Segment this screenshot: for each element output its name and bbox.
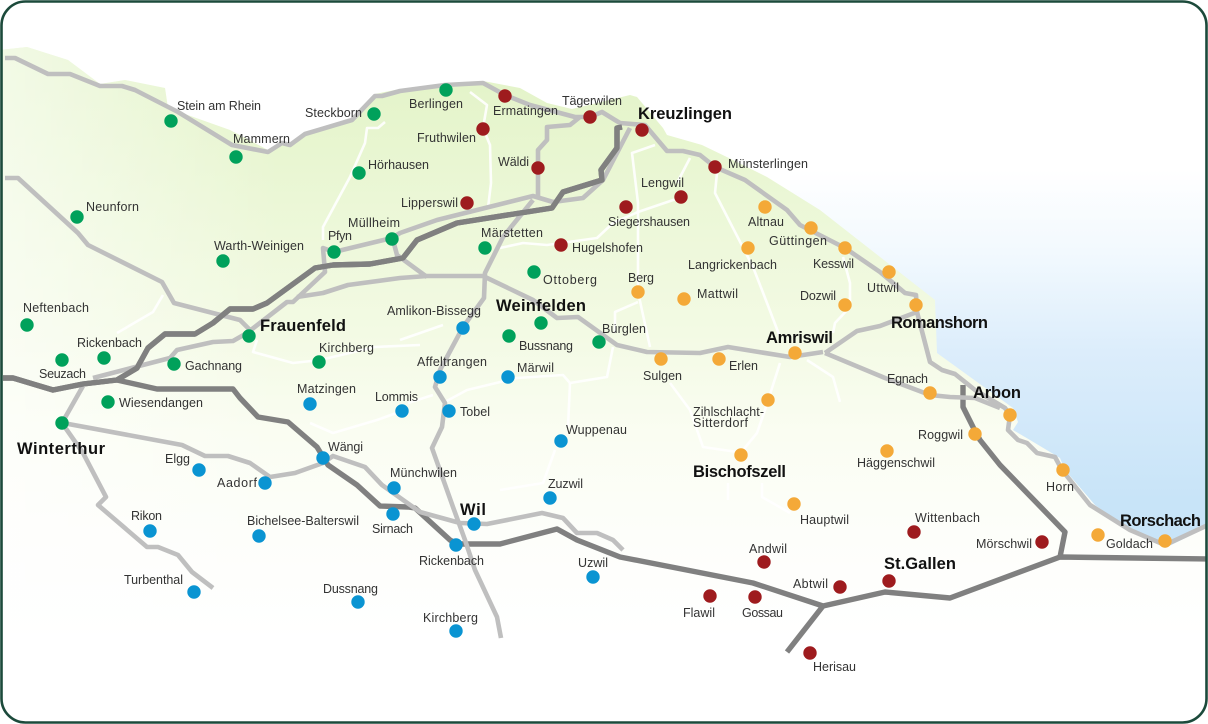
town: Hauptwil — [787, 497, 849, 527]
town: Horn: Horn — [1046, 480, 1074, 494]
town: Sirnach — [372, 507, 413, 536]
main rail lines — [3, 127, 1208, 652]
town: Herisau — [803, 646, 856, 674]
town: Lipperswil: Lipperswil — [401, 196, 458, 210]
town: Kreuzlingen — [635, 105, 732, 137]
town: Zuzwil: Zuzwil — [548, 477, 583, 491]
town: Lommis — [375, 390, 418, 418]
town: Stein am Rhein: Stein am Rhein — [177, 99, 261, 113]
town: Wittenbach — [907, 511, 980, 539]
town: Egnach: Egnach — [887, 372, 928, 386]
town: Fruthwilen — [418, 122, 490, 142]
town: Fruthwilen: Fruthwilen — [417, 131, 476, 145]
town: Altnau — [748, 200, 784, 229]
town: Romanshorn — [891, 298, 988, 332]
town: Matzingen: Matzingen — [297, 382, 356, 396]
town: Rikon: Rikon — [131, 509, 162, 523]
town: Berlingen — [409, 83, 463, 111]
town: Turbenthal: Turbenthal — [124, 573, 183, 587]
town: Bussnang: Bussnang — [519, 339, 573, 353]
town: Affeltrangen — [417, 355, 487, 384]
town: Goldach: Goldach — [1106, 537, 1153, 551]
town: Abtwil — [793, 577, 847, 594]
town: Zihlschlacht-Sitterdorf — [693, 393, 775, 430]
land area — [2, 47, 1206, 570]
town: Bussnang — [502, 329, 573, 353]
town markers: blue region — [124, 304, 627, 638]
town: Bischofszell — [693, 448, 786, 481]
town: Wil — [460, 501, 486, 531]
town: Mörschwil: Mörschwil — [976, 537, 1032, 551]
town: Langrickenbach — [688, 241, 777, 272]
town: Gossau — [742, 590, 783, 620]
town: Güttingen: Güttingen — [769, 234, 827, 248]
town: Dussnang: Dussnang — [323, 582, 378, 596]
town markers: red region — [401, 89, 1049, 674]
town markers: orange region — [628, 200, 1201, 551]
town: Frauenfeld — [242, 317, 346, 343]
town: Winterthur: Winterthur — [17, 440, 106, 458]
town: Hugelshofen: Hugelshofen — [572, 241, 643, 255]
town: Goldach — [1091, 528, 1153, 551]
town: Rickenbach south: Rickenbach — [419, 554, 484, 568]
town: Rorschach: Rorschach — [1120, 512, 1201, 530]
town: Turbenthal — [124, 573, 201, 599]
town: Gachnang: Gachnang — [185, 359, 242, 373]
town: Lommis: Lommis — [375, 390, 418, 404]
town: Amriswil — [766, 329, 833, 360]
town: Sulgen: Sulgen — [643, 369, 682, 383]
town: Märstetten — [478, 226, 543, 255]
secondary rail lines — [5, 58, 1208, 638]
town: Amlikon-Bissegg: Amlikon-Bissegg — [387, 304, 481, 318]
town: Siegershausen — [608, 200, 690, 229]
town: Aadorf: Aadorf — [217, 476, 258, 490]
town: Uttwil — [867, 265, 899, 295]
town: Arbon: Arbon — [973, 384, 1021, 402]
town: Dozwil: Dozwil — [800, 289, 836, 303]
town: St.Gallen — [882, 555, 956, 588]
town: Gachnang — [167, 357, 242, 373]
town: Sirnach: Sirnach — [372, 522, 413, 536]
town: Kirchberg north: Kirchberg — [319, 341, 374, 355]
town: Münsterlingen: Münsterlingen — [728, 157, 808, 171]
town: Mattwil: Mattwil — [697, 287, 738, 301]
town: Münchwilen: Münchwilen — [390, 466, 457, 480]
town: Berg — [628, 271, 654, 299]
town: Hörhausen: Hörhausen — [368, 158, 429, 172]
town: Altnau: Altnau — [748, 215, 784, 229]
town: Lengwil: Lengwil — [641, 176, 684, 190]
town: Lengwil — [641, 176, 688, 204]
town: Kirchberg south: Kirchberg — [423, 611, 478, 625]
town: Rorschach — [1120, 512, 1201, 548]
town: Roggwil — [918, 427, 982, 442]
town: Bichelsee-Balterswil: Bichelsee-Balterswil — [247, 514, 359, 528]
town: Romanshorn: Romanshorn — [891, 314, 988, 332]
town markers: green region — [17, 83, 646, 458]
town: Herisau: Herisau — [813, 660, 856, 674]
town: Roggwil: Roggwil — [918, 428, 963, 442]
town: Müllheim: Müllheim — [348, 216, 400, 230]
town: Wil: Wil — [460, 501, 486, 519]
town: Erlen — [712, 352, 758, 373]
town: Uzwil: Uzwil — [578, 556, 608, 570]
town: Warth-Weinigen — [214, 239, 304, 268]
town: Bichelsee-Balterswil — [247, 514, 359, 543]
town: Arbon — [973, 384, 1021, 422]
town: Pfyn — [327, 229, 352, 259]
town: Uzwil — [578, 556, 608, 584]
town: Rickenbach south — [419, 538, 484, 568]
town: Häggenschwil — [857, 444, 935, 470]
town: Amriswil: Amriswil — [766, 329, 833, 347]
town: Wuppenau — [554, 423, 627, 448]
town: Ottoberg: Ottoberg — [543, 273, 597, 287]
town: Märstetten: Märstetten — [481, 226, 543, 240]
town: Zihlschlacht-Sitterdorf: Zihlschlacht- — [693, 405, 764, 419]
town: Affeltrangen: Affeltrangen — [417, 355, 487, 369]
town: Neunforn — [70, 200, 139, 224]
town: Tobel — [442, 404, 490, 419]
town: Sulgen — [643, 352, 682, 383]
town: Tägerwilen: Tägerwilen — [562, 94, 622, 108]
town: Häggenschwil: Häggenschwil — [857, 456, 935, 470]
town: Elgg — [165, 452, 206, 477]
town: Horn — [1046, 463, 1074, 494]
town: Kreuzlingen: Kreuzlingen — [638, 105, 732, 123]
town: Kirchberg south — [423, 611, 478, 638]
town: Flawil: Flawil — [683, 606, 715, 620]
town: Mattwil — [677, 287, 738, 306]
upper rail lines beneath main line — [5, 117, 823, 378]
town: Stein am Rhein — [164, 99, 261, 128]
town: Egnach — [887, 372, 937, 400]
town: Märwil — [501, 361, 554, 384]
town: Kesswil: Kesswil — [813, 257, 854, 271]
town: Münchwilen — [387, 466, 457, 495]
town: Dozwil — [800, 289, 852, 312]
town: Wuppenau: Wuppenau — [566, 423, 627, 437]
land west fade — [2, 47, 192, 417]
town: Weinfelden: Weinfelden — [496, 297, 586, 315]
town: Güttingen — [769, 221, 827, 248]
town: Neftenbach — [20, 301, 89, 332]
minor roads — [117, 92, 850, 513]
lake — [836, 221, 1206, 548]
town: St.Gallen: St.Gallen — [884, 555, 956, 573]
town: Uttwil: Uttwil — [867, 281, 899, 295]
town: Winterthur — [17, 416, 106, 458]
town: Hugelshofen — [554, 238, 643, 255]
town: Bischofszell: Bischofszell — [693, 463, 786, 481]
town: Müllheim — [348, 216, 400, 246]
main line overlay — [3, 127, 622, 390]
town: Rickenbach west: Rickenbach — [77, 336, 142, 350]
town: Mörschwil — [976, 535, 1049, 551]
town: Ermatingen: Ermatingen — [493, 104, 558, 118]
town: Wittenbach: Wittenbach — [915, 511, 980, 525]
town: Siegershausen: Siegershausen — [608, 215, 690, 229]
town: Kesswil — [813, 241, 854, 271]
town: Seuzach — [40, 353, 86, 378]
town: Berlingen: Berlingen — [409, 97, 463, 111]
town: Andwil — [749, 542, 787, 569]
town: Rickenbach west — [77, 336, 142, 365]
town: Abtwil: Abtwil — [793, 577, 828, 591]
town: Wängi: Wängi — [328, 440, 363, 454]
town: Frauenfeld: Frauenfeld — [260, 317, 346, 335]
town: Wängi — [316, 440, 363, 465]
town: Erlen: Erlen — [729, 359, 758, 373]
town: Kirchberg north — [312, 341, 374, 369]
town: Pfyn: Pfyn — [328, 229, 352, 243]
town: Wäldi — [498, 155, 545, 175]
town: Flawil — [683, 589, 717, 620]
town: Ermatingen — [493, 89, 558, 118]
town: Warth-Weinigen: Warth-Weinigen — [214, 239, 304, 253]
town: Hörhausen — [352, 158, 429, 180]
town: Mammern — [229, 132, 290, 164]
town: Ottoberg — [527, 265, 597, 287]
town: Berg: Berg — [628, 271, 654, 285]
town: Langrickenbach: Langrickenbach — [688, 258, 777, 272]
town: Rikon — [131, 509, 162, 538]
town: Elgg: Elgg — [165, 452, 190, 466]
town: Mammern: Mammern — [233, 132, 290, 146]
town: Zuzwil — [543, 477, 583, 505]
town: Steckborn: Steckborn — [305, 106, 362, 120]
town: Neftenbach: Neftenbach — [23, 301, 89, 315]
town: Hauptwil: Hauptwil — [800, 513, 849, 527]
town: Wäldi: Wäldi — [498, 155, 529, 169]
town: Tobel: Tobel — [460, 405, 490, 419]
town: Bürglen — [592, 322, 646, 349]
town: Matzingen — [297, 382, 356, 411]
town: Dussnang — [323, 582, 378, 609]
town: Weinfelden — [496, 297, 586, 330]
town: Wiesendangen: Wiesendangen — [119, 396, 203, 410]
town: Seuzach: Seuzach — [39, 367, 86, 381]
town: Andwil: Andwil — [749, 542, 787, 556]
town: Bürglen: Bürglen — [602, 322, 646, 336]
town: Gossau: Gossau — [742, 606, 783, 620]
town: Märwil: Märwil — [517, 361, 554, 375]
town: Tägerwilen — [562, 94, 622, 124]
town: Amlikon-Bissegg — [387, 304, 481, 335]
town: Neunforn: Neunforn — [86, 200, 139, 214]
town: Münsterlingen — [708, 157, 808, 174]
town: Zihlschlacht-Sitterdorf: Sitterdorf — [693, 416, 749, 430]
